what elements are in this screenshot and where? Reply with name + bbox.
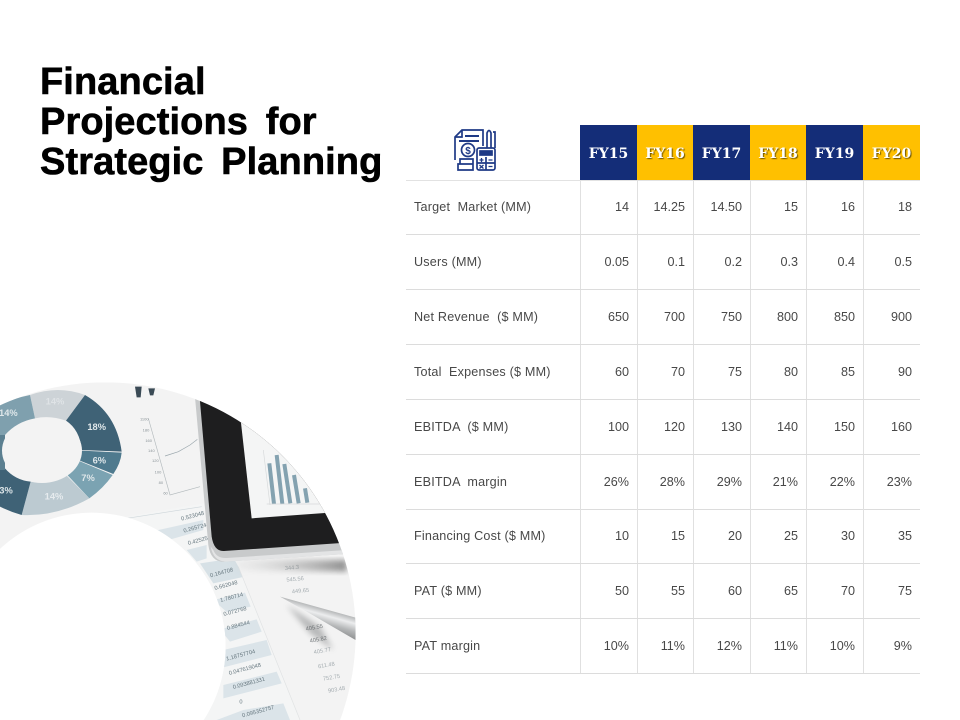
row: EBITDA margin: 23%: [887, 475, 912, 489]
row: PAT: 65: [784, 584, 798, 598]
line chart: 160: [145, 438, 153, 443]
title: Financial: [40, 61, 206, 103]
row: EBITDA: 160: [891, 420, 912, 434]
row: EBITDA margin: EBITDA margin: [414, 475, 507, 489]
row: Target Market: 18: [898, 200, 912, 214]
row: Target Market: 15: [784, 200, 798, 214]
donut chart: 14%: [45, 491, 64, 501]
row: EBITDA: 140: [777, 420, 798, 434]
row: Net Revenue: 850: [834, 310, 855, 324]
row: PAT margin: 11%: [661, 639, 685, 653]
header: FY20: FY20: [872, 146, 911, 162]
row: Total Expenses: 80: [784, 365, 798, 379]
donut chart: 6%: [93, 455, 107, 465]
figures on the paper right column: 344.3: [285, 565, 299, 572]
row: Net Revenue: 800: [777, 310, 798, 324]
row: PAT margin: 11%: [774, 639, 798, 653]
row: Net Revenue: 750: [721, 310, 742, 324]
spreadsheet figures: 0.662048: [214, 580, 238, 592]
tablet: [195, 399, 343, 562]
donut chart: [0, 390, 122, 515]
figures on the paper right column: [285, 565, 346, 695]
row: Target Market: 14.50: [710, 200, 742, 214]
table header row: [406, 125, 920, 181]
row: Users: 0.05: [604, 255, 629, 269]
row: Net Revenue: Net Revenue ($ MM): [414, 310, 538, 324]
icon: financial documents and calculator: $: [465, 146, 471, 157]
row: Net Revenue: 900: [891, 310, 912, 324]
row: PAT: [406, 564, 920, 619]
spreadsheet figures: 0.093881331: [232, 677, 266, 691]
figures on the paper right column: 903.48: [328, 686, 346, 695]
pen: [280, 597, 358, 650]
header: FY15: FY15: [589, 146, 628, 162]
row: Net Revenue: [406, 290, 920, 345]
spreadsheet figures: 0.265724: [183, 523, 207, 535]
row: EBITDA: [406, 400, 920, 455]
donut chart: 14%: [46, 397, 65, 407]
row: PAT margin: PAT margin: [414, 639, 480, 653]
header: FY19: FY19: [815, 146, 854, 162]
row: Net Revenue: 650: [608, 310, 629, 324]
spreadsheet figures: [128, 506, 290, 720]
spreadsheet figures: 0.164708: [210, 567, 234, 579]
row: Target Market: [406, 180, 920, 235]
row: Total Expenses: 90: [898, 365, 912, 379]
row: PAT margin: 10%: [830, 639, 855, 653]
row: Total Expenses: Total Expenses ($ MM): [414, 365, 551, 379]
row: EBITDA: 130: [721, 420, 742, 434]
row: EBITDA margin: [406, 455, 920, 510]
line chart: 100: [155, 469, 162, 474]
row: PAT: 60: [728, 584, 742, 598]
row: Financing Cost: 35: [898, 529, 912, 543]
figures on the paper right column: 449.65: [292, 588, 309, 595]
spreadsheet figures: 1.780714: [220, 592, 244, 604]
row: EBITDA: 150: [834, 420, 855, 434]
header: FY16: [637, 125, 693, 180]
row: Users: 0.3: [780, 255, 798, 269]
line chart: [135, 387, 200, 496]
row: EBITDA margin: 21%: [773, 475, 798, 489]
spreadsheet figures: 1.18757704: [226, 649, 256, 663]
header: FY18: [750, 125, 806, 180]
row: Users: Users (MM): [414, 255, 482, 269]
row: Total Expenses: 60: [615, 365, 629, 379]
row: EBITDA: 100: [608, 420, 629, 434]
row: PAT margin: 12%: [717, 639, 742, 653]
row: EBITDA margin: 29%: [717, 475, 742, 489]
row: EBITDA margin: 26%: [604, 475, 629, 489]
donut chart: 18%: [87, 422, 107, 432]
line chart: 60: [163, 491, 169, 496]
title: Strategic Planning: [40, 141, 382, 183]
header: FY19: [806, 125, 863, 180]
row: Target Market: Target Market (MM): [414, 200, 531, 214]
row: PAT: 55: [671, 584, 685, 598]
row: EBITDA: EBITDA ($ MM): [414, 420, 508, 434]
row: Total Expenses: 75: [728, 365, 742, 379]
row: Financing Cost: Financing Cost ($ MM): [414, 529, 546, 543]
row: PAT: PAT ($ MM): [414, 584, 482, 598]
spreadsheet figures: 0.072768: [223, 606, 247, 618]
row: Users: 0.4: [837, 255, 855, 269]
line chart: 140: [148, 448, 155, 453]
row: EBITDA margin: 28%: [660, 475, 685, 489]
title: [40, 61, 382, 183]
row: Users: 0.2: [724, 255, 742, 269]
spreadsheet figures: 0.047619048: [228, 663, 262, 677]
row: EBITDA margin: 22%: [830, 475, 855, 489]
row: Financing Cost: 15: [671, 529, 685, 543]
row: Target Market: 14.25: [653, 200, 685, 214]
line chart: 180: [143, 427, 150, 432]
header: FY17: FY17: [702, 146, 741, 162]
row: Users: [406, 235, 920, 290]
row: Total Expenses: 85: [841, 365, 855, 379]
row: Financing Cost: 25: [784, 529, 798, 543]
row: PAT: 50: [615, 584, 629, 598]
header: FY17: [693, 125, 750, 180]
tablet shadow: [230, 560, 347, 572]
row: Target Market: 14: [615, 200, 629, 214]
row: EBITDA: 120: [664, 420, 685, 434]
row: Financing Cost: 10: [615, 529, 629, 543]
figures on the paper right column: 752.75: [323, 674, 341, 683]
line chart: 1100: [140, 417, 149, 422]
line chart: 80: [159, 480, 164, 485]
row: Net Revenue: 700: [664, 310, 685, 324]
row: Total Expenses: 70: [671, 365, 685, 379]
icon: financial documents and calculator: [454, 129, 496, 171]
row: PAT: 70: [841, 584, 855, 598]
spreadsheet figures: 0.523048: [181, 511, 205, 523]
figures on the paper right column: 545.56: [286, 576, 304, 584]
donut chart: 7%: [81, 473, 95, 483]
row: Users: 0.5: [894, 255, 912, 269]
row: PAT margin: 9%: [894, 639, 912, 653]
row: Target Market: 16: [841, 200, 855, 214]
figures on the paper right column: 611.48: [318, 661, 335, 670]
photo ring: financial documents and tablet: [0, 382, 356, 720]
row: PAT margin: [406, 619, 920, 674]
spreadsheet figures: 0.884544: [226, 620, 251, 632]
row: Users: 0.1: [667, 255, 685, 269]
figures on the paper right column: 405.82: [309, 636, 327, 645]
header: FY20: [863, 125, 920, 180]
row: PAT: 75: [898, 584, 912, 598]
title: Projections for: [40, 101, 317, 143]
spreadsheet figures: 0: [239, 699, 242, 705]
row: Financing Cost: 30: [841, 529, 855, 543]
spreadsheet figures: 0.425257: [187, 535, 212, 547]
financial table: [406, 125, 920, 674]
header: FY15: [580, 125, 637, 180]
row: Financing Cost: 20: [728, 529, 742, 543]
row: Total Expenses: [406, 345, 920, 400]
row: PAT margin: 10%: [604, 639, 629, 653]
row: Financing Cost: [406, 509, 920, 564]
header: FY18: FY18: [758, 146, 798, 162]
header: FY16: FY16: [645, 146, 685, 162]
figures on the paper right column: 405.77: [313, 647, 331, 656]
spreadsheet figures: 0.095352757: [242, 705, 275, 719]
figures on the paper right column: 405.55: [305, 624, 323, 633]
line chart: 120: [152, 458, 159, 463]
